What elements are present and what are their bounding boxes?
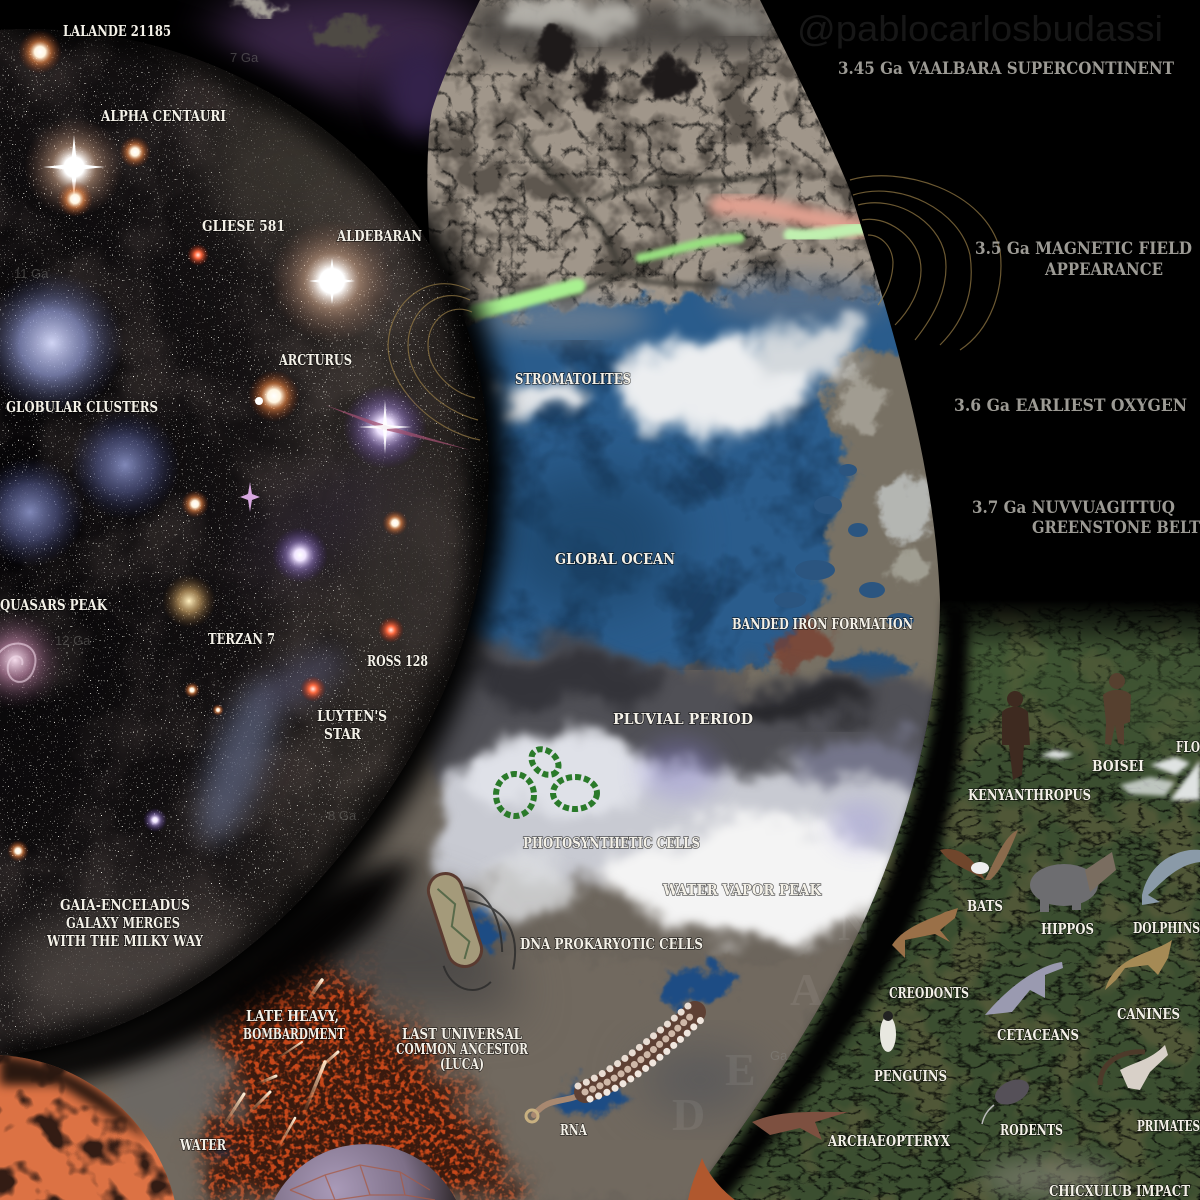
icon: Boisei figure [1103, 673, 1131, 745]
label: water vapor peak: WATER VAPOR PEAK [662, 882, 822, 899]
label: Aldebaran: ALDEBARAN [336, 228, 422, 245]
label: globular clusters: GLOBULAR CLUSTERS [6, 399, 158, 416]
icon: cracked moon [274, 1144, 456, 1200]
label: Gaia-Enceladus [46, 897, 204, 950]
volcanic plumes [535, 28, 700, 110]
label: Ross 128: ROSS 128 [367, 653, 428, 670]
faint era markers: Ga [770, 1048, 788, 1063]
label: RNA: RNA [560, 1122, 588, 1139]
icon: globular clusters [0, 271, 180, 567]
label: Nuvvuagittuq [972, 498, 1200, 538]
snowy peaks [1040, 750, 1200, 800]
icon: bat [940, 830, 1018, 880]
icon: Aldebaran star [270, 219, 394, 343]
label: penguins: PENGUINS [874, 1068, 947, 1085]
label: late heavy bombardment [243, 1008, 345, 1043]
label: Alpha Centauri: ALPHA CENTAURI [100, 108, 226, 125]
mountains [427, 0, 885, 328]
ocean [468, 284, 900, 675]
panel: purple nebula strip at the top [210, 0, 490, 135]
label: Kenyanthropus: KENYANTHROPUS [968, 787, 1091, 804]
flats pools [774, 464, 914, 627]
cloud fringe [480, 860, 580, 920]
shadow between band and green land [695, 600, 968, 1200]
lightning tints [640, 740, 720, 800]
aurora [475, 205, 862, 312]
milky band [184, 673, 292, 851]
storm clouds [430, 636, 950, 790]
panel: dark galaxy disc [0, 9, 507, 1075]
label: Terzan 7: TERZAN 7 [208, 631, 275, 648]
grey dust edge [210, 100, 390, 240]
brown land [712, 954, 807, 958]
icon: Lalande 21185 star [18, 30, 62, 74]
icon: archaeopteryx [752, 1112, 848, 1140]
label: LUCA: (LUCA) [440, 1056, 484, 1073]
icon: meteors [222, 980, 338, 1152]
label: banded iron formation: BANDED IRON FORMATION [732, 616, 913, 633]
label: hippos: HIPPOS [1041, 921, 1094, 938]
label: Gaia-Enceladus: WITH THE MILKY WAY [46, 933, 204, 950]
icon: hippo [1030, 852, 1116, 912]
lava field [150, 920, 570, 1200]
label: photosynthetic cells: PHOTOSYNTHETIC CELLS [523, 835, 700, 852]
label: late heavy bombardment: LATE HEAVY, [246, 1008, 339, 1025]
label: Arcturus: ARCTURUS [278, 352, 352, 369]
label: Boisei: BOISEI [1092, 758, 1144, 775]
label: global ocean: GLOBAL OCEAN [555, 551, 675, 568]
icon: primate [1100, 1045, 1168, 1090]
icon: bacterium [416, 859, 525, 997]
icon: cetacean [985, 962, 1063, 1015]
faint era markers: E [725, 1044, 756, 1095]
label: bats: BATS [967, 898, 1003, 915]
icon: orange planet [0, 1050, 210, 1200]
label: late heavy bombardment: BOMBARDMENT [243, 1026, 345, 1043]
label: Gaia-Enceladus: GAIA-ENCELADUS [60, 897, 190, 914]
label: LUCA: COMMON ANCESTOR [396, 1041, 529, 1058]
label: rodents: RODENTS [1000, 1122, 1063, 1139]
icon: penguin [880, 1011, 896, 1052]
label: magnetic field: APPEARANCE [1044, 260, 1163, 280]
icon: Terzan 7 cluster [162, 574, 216, 628]
icon: quasar [0, 610, 65, 710]
rivers [520, 130, 790, 310]
white clouds and vapour [440, 732, 960, 940]
label: cetaceans: CETACEANS [997, 1027, 1079, 1044]
pools [214, 910, 740, 1165]
faint era markers: D [672, 1089, 705, 1140]
upper clouds [499, 320, 860, 433]
label: archaeopteryx: ARCHAEOPTERYX [827, 1133, 951, 1150]
label: Luyten's star [317, 708, 387, 743]
label: Luyten's star: STAR [324, 726, 362, 743]
icon: rodent [982, 1074, 1033, 1124]
label: water: WATER [179, 1137, 227, 1154]
label: Lalande 21185: LALANDE 21185 [63, 23, 171, 40]
faint era markers: 8 Ga [328, 808, 357, 823]
icon: pterosaur crest [688, 1158, 735, 1200]
label: quasars peak: QUASARS PEAK [0, 597, 108, 614]
watermark: @pablocarlosbudassi [797, 8, 1163, 49]
faint era markers: N [838, 899, 871, 950]
label: canines: CANINES [1117, 1006, 1180, 1023]
icon: photosynthetic cells [496, 744, 597, 816]
label: pluvial period: PLUVIAL PERIOD [613, 711, 753, 728]
icon: RNA strand [526, 1006, 702, 1122]
label: stromatolites: STROMATOLITES [515, 371, 631, 388]
label: magnetic field [975, 239, 1192, 280]
faint era markers: 11 Ga [14, 266, 49, 281]
panel: central timeline band [0, 0, 960, 1200]
tidal flats [749, 340, 940, 686]
base below mountains [0, 659, 871, 1200]
faint era markers [14, 50, 871, 1140]
label: creodonts: CREODONTS [889, 985, 969, 1002]
faint era markers: 7 Ga [230, 50, 259, 65]
icon: magnetic field arcs [388, 176, 1001, 440]
label: LUCA [396, 1026, 529, 1073]
label: LUCA: LAST UNIVERSAL [402, 1026, 522, 1043]
icon: Arcturus star [248, 370, 300, 422]
icon: purple giant star [325, 385, 470, 469]
faint era markers: A [790, 964, 823, 1015]
label: Nuvvuagittuq: 3.7 Ga NUVVUAGITTUQ [972, 498, 1175, 518]
icon: dolphin [1142, 850, 1200, 905]
label: DNA prokaryotic cells: DNA PROKARYOTIC CELLS [520, 936, 703, 953]
label: Luyten's star: LUYTEN'S [317, 708, 387, 725]
faint era markers: 12 Ga [55, 633, 91, 648]
grey smoke [115, 1037, 235, 1133]
label: Gaia-Enceladus: GALAXY MERGES [66, 915, 180, 932]
icon: field stars [7, 482, 408, 862]
icon: Kenyanthropus figure [1002, 691, 1030, 780]
dark inner rim [0, 29, 489, 1055]
label: Gliese 581: GLIESE 581 [202, 218, 285, 235]
icon: Gliese 581 star [187, 244, 209, 266]
icon: creodont [892, 908, 958, 958]
icon: canine [1105, 940, 1172, 990]
panel: green land with hominins and animals [680, 600, 1200, 1200]
icon: Alpha Centauri stars [24, 117, 151, 217]
